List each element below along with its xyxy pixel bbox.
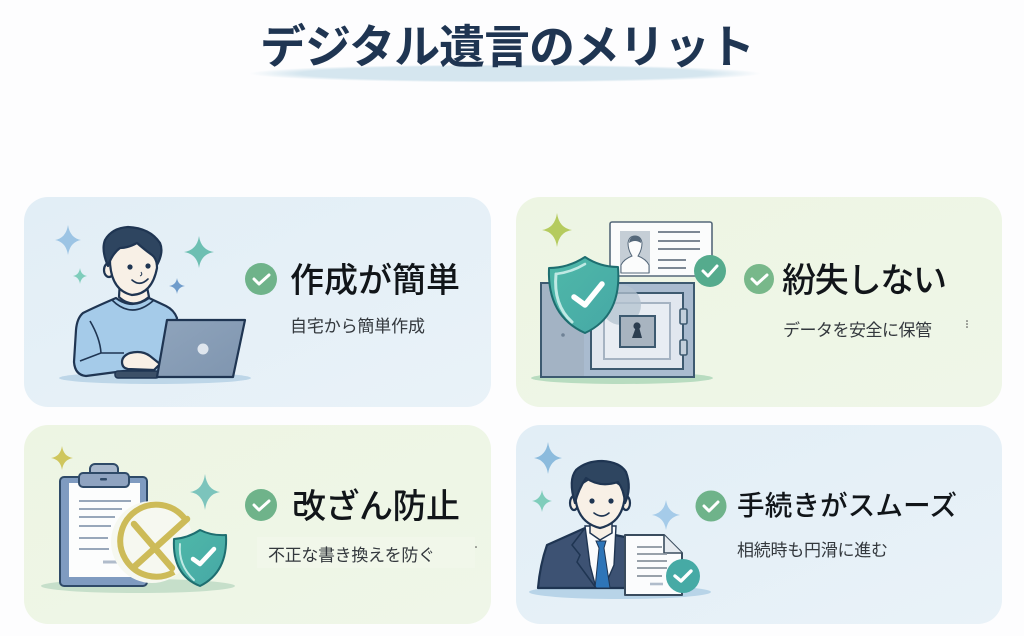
- icon: sparkles: [532, 442, 680, 530]
- subtext: 自宅から簡単作成: [290, 317, 425, 336]
- subtext: データを安全に保管: [783, 320, 932, 340]
- illustration: safe: [531, 283, 713, 384]
- panel: 手続きがスムーズ: [516, 425, 1002, 624]
- illustration: clipboard: [41, 464, 235, 593]
- icon: check badge: [696, 490, 726, 522]
- icon: check badge: [744, 264, 774, 294]
- panel: 紛失しない: [516, 197, 1002, 407]
- icon: document check badge: [666, 559, 700, 593]
- subtext: 不正な書き換えを防ぐ: [268, 546, 435, 565]
- illustration: document: [625, 535, 682, 595]
- illustration: shield: [549, 257, 618, 333]
- illustration: tamper X mark: [111, 501, 193, 583]
- heading: 改ざん防止: [292, 488, 460, 526]
- icon: check badge: [245, 263, 277, 295]
- icon: small check badge: [694, 255, 726, 287]
- icon: check badge: [245, 489, 277, 521]
- heading: 作成が簡単: [290, 262, 460, 300]
- panel: 作成が簡単: [24, 197, 491, 407]
- title underline swash: [249, 64, 761, 82]
- illustration: ID card: [610, 222, 712, 276]
- title: デジタル遺言のメリット: [260, 21, 755, 73]
- illustration: shield: [174, 530, 226, 586]
- illustration: businessman: [529, 461, 711, 599]
- illustration: person at laptop: [59, 227, 251, 384]
- heading: 紛失しない: [782, 262, 947, 300]
- icon: sparkles: [55, 225, 214, 294]
- icon: sparkles: [51, 446, 220, 510]
- heading: 手続きがスムーズ: [737, 490, 957, 521]
- icon: sparkle: [542, 213, 572, 247]
- panel: 改ざん防止: [24, 425, 491, 624]
- subtext: 相続時も円滑に進む: [737, 541, 888, 560]
